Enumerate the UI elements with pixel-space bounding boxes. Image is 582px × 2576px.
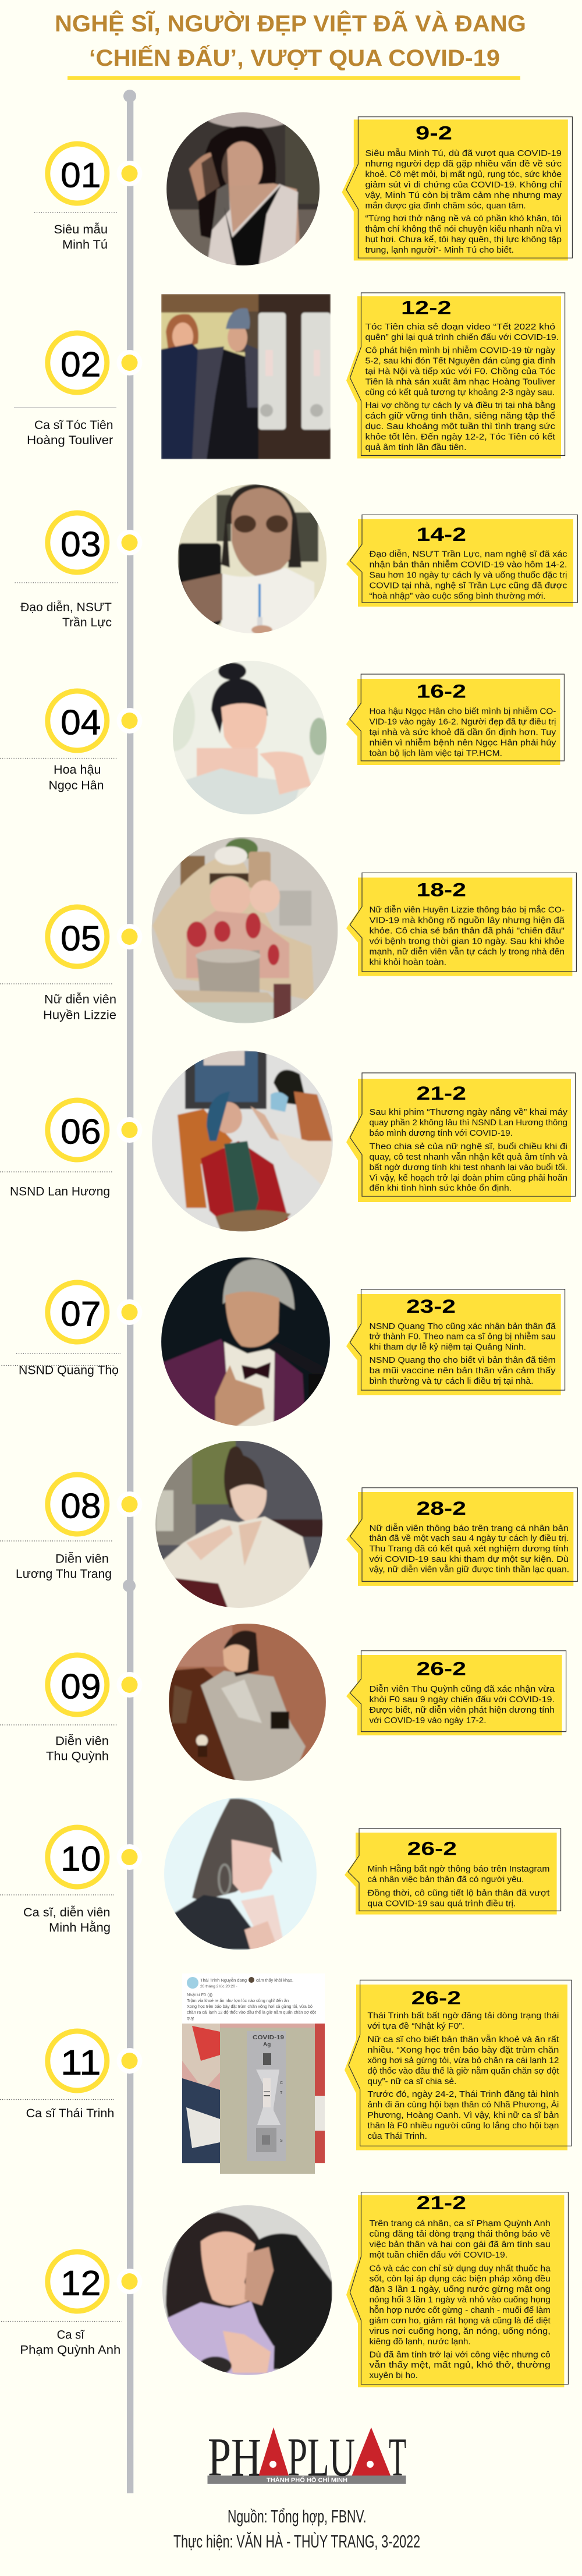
callout: 12-2: Hai vợ chồng tự cách ly và điều trị tại nhà bằng — [365, 401, 555, 410]
title: NGHỆ SĨ, NGƯỜI ĐẸP VIỆT ĐÃ VÀ ĐANG — [55, 10, 526, 37]
timeline dot — [116, 2269, 142, 2294]
callout: 18-2: khi khỏi hoàn toàn. — [369, 958, 446, 968]
callout: 26-2 Thái Trinh: Phương, Hoàng Oanh. Vì vậy, khi nữ ca sĩ bản — [367, 2111, 559, 2120]
panel: item 12 Phạm Quỳnh Anh — [1, 2192, 568, 2387]
number badge 01 — [48, 144, 107, 203]
callout: 26-2 Minh Hằng: Đồng thời, cô cũng tiết lộ bản thân đã vượt — [367, 1888, 549, 1898]
callout: 21-2 Phạm Quỳnh Anh: xuyên bị ho. — [369, 2371, 418, 2380]
number badge 08 — [48, 1475, 107, 1534]
callout: 26-2 Thái Trinh: thân là F0 nhiều người cũng lo lắng cho hội bạn — [367, 2121, 559, 2131]
callout: 9-2: trung, lạnh người”- Minh Tú cho biết. — [365, 246, 514, 255]
panel: item 02 Tóc Tiên, Hoàng Touliver — [14, 293, 565, 459]
callout: 21-2 Phạm Quỳnh Anh: 21-2 — [417, 2192, 466, 2213]
photo: couple and test kits — [161, 294, 331, 459]
name: Minh Tú — [62, 238, 108, 251]
callout: 14-2 — [346, 515, 577, 607]
callout: 18-2: với bệnh trong thời gian 10 ngày. Sau khi khỏe — [369, 937, 565, 947]
number badge 01: 01 — [61, 156, 101, 194]
callout: 26-2 Thái Trinh: Nữ ca sĩ cho biết bản thân vẫn khoẻ và ăn rất — [367, 2035, 559, 2044]
name — [49, 763, 104, 792]
name: Thu Quỳnh — [46, 1750, 109, 1763]
callout: 28-2 — [346, 1488, 577, 1586]
callout: 14-2: Đạo diễn, NSƯT Trần Lực, nam nghệ sĩ đã xác — [369, 549, 567, 559]
callout: 21-2: quay, cô test nhanh vẫn nhận kết quả âm tính và — [369, 1152, 568, 1162]
callout: 26-2 Thái Trinh: của Thái Trinh. — [367, 2132, 427, 2141]
callout: 26-2 Thái Trinh: quỵ”- nữ ca sĩ chia sẻ. — [367, 2077, 456, 2086]
photo: Huyền Lizzie — [151, 837, 338, 1025]
number badge 06: 06 — [61, 1112, 101, 1151]
callout: 18-2: Nữ diễn viên Huyền Lizzie thông báo bị mắc CO- — [369, 905, 565, 915]
photo: social post with test kit: chăn ra cái lạnh 12 độ thốc vào đầu thế là giờ nằm quấn chăn sợ đột — [187, 2010, 317, 2015]
callout: 12-2: dục. Sau khoảng một tuần thì tình trạng sức — [365, 422, 555, 431]
callout: 23-2: NSND Quang thọ cho biết vì bản thân đã tiêm — [369, 1356, 556, 1365]
callout: 9-2 — [342, 117, 572, 261]
panel: item 10 Minh Hằng — [0, 1797, 561, 1951]
callout: 26-2 Thái Trinh: với tựa đề “Nhật ký F0”. — [367, 2022, 464, 2031]
panel: item 08 Lương Thu Trang — [0, 1440, 577, 1609]
callout: 26-2 Thái Trinh — [345, 1980, 572, 2150]
photo: social post with test kit — [182, 1973, 325, 2174]
callout: 21-2: quay phần 2 không lâu thì NSND Lan Hương thông — [369, 1118, 567, 1128]
number badge 05: 05 — [61, 919, 101, 958]
timeline dot — [116, 1491, 142, 1517]
callout: 12-2: Cô phát hiện mình bị nhiễm COVID-19 từ ngày — [365, 345, 556, 355]
name — [27, 419, 113, 447]
name: Siêu mẫu — [54, 223, 108, 236]
callout: 21-2: 21-2 — [417, 1083, 466, 1104]
name: Lương Thu Trang — [16, 1568, 112, 1581]
panel: item 06 Lan Hương — [0, 1050, 575, 1232]
callout: 28-2: Nữ diễn viên thông báo trên trang cá nhân bản — [369, 1523, 569, 1533]
callout: 14-2: nhận bản thân nhiễm COVID-19 vào hôm 14-2. — [369, 559, 567, 569]
callout: 21-2 Phạm Quỳnh Anh: sốt, còn lại áp dụng các biện pháp xông đều — [369, 2274, 551, 2284]
callout: 12-2: khỏe tốt lên. Đến ngày 12-2, Tóc Tiên có kết — [365, 433, 555, 442]
photo: social post with test kit: Thái Trinh Nguyễn đang — [200, 1978, 247, 1983]
name: Hoa hậu — [54, 763, 101, 777]
name — [20, 601, 112, 629]
photo: Lương Thu Trang — [155, 1440, 324, 1609]
panel: item 01 Minh Tú — [34, 102, 572, 268]
callout: 28-2: 28-2 — [417, 1498, 466, 1519]
photo: Minh Tú — [166, 102, 321, 268]
number badge 04: 04 — [61, 703, 101, 742]
logo: Pháp Luật: PLU — [288, 2428, 355, 2488]
number badge 10 — [48, 1827, 107, 1887]
photo: social post with test kit: Ag — [263, 2042, 271, 2048]
callout: 26-2 Thái Trinh: 26-2 — [411, 1987, 461, 2008]
callout: 26-2 Thu Quỳnh: Được biết, nữ diễn viên phát hiện dương tính — [369, 1705, 555, 1715]
number badge 09: 09 — [61, 1667, 101, 1706]
title: ‘CHIẾN ĐẤU’, VƯỢT QUA COVID-19 — [89, 44, 500, 71]
callout: 21-2 Phạm Quỳnh Anh: một tuần chiến đấu với COVID-19. — [369, 2251, 508, 2260]
number badge 11: 11 — [61, 2043, 101, 2082]
logo: Pháp Luật: THÀNH PHỐ HỒ CHÍ MINH — [267, 2476, 347, 2484]
callout: 26-2 Thái Trinh: độ thốc vào đầu thế là giờ nằm quấn chăn sợ đột — [367, 2066, 559, 2076]
photo: Thu Quỳnh — [168, 1623, 327, 1781]
number badge 07: 07 — [61, 1295, 101, 1333]
number badge 02: 02 — [61, 345, 101, 384]
source and credits: Thực hiện: VĂN HÀ - THÙY TRANG, 3-2022 — [173, 2531, 420, 2552]
timeline dot — [116, 530, 142, 555]
logo: Pháp Luật — [207, 2428, 406, 2488]
callout: 16-2: tại nhà và sức khoẻ đã dần ổn định hơn. Tuy — [369, 728, 556, 737]
number badge 12 — [48, 2252, 107, 2311]
panel: item 09 Thu Quỳnh — [0, 1623, 566, 1781]
number badge 05 — [48, 907, 107, 966]
callout: 21-2 Phạm Quỳnh Anh: việc bản thân và hai con gái đã âm tính sau — [369, 2240, 551, 2249]
callout: 16-2: nhiên vì nhiễm bệnh nên Ngọc Hân phải hủy — [369, 738, 556, 747]
logo: Pháp Luật: T — [389, 2428, 406, 2488]
callout: 26-2 Minh Hằng: qua COVID-19 sau quá trình điều trị. — [367, 1899, 516, 1908]
callout: 26-2 Minh Hằng — [345, 1829, 561, 1915]
callout: 26-2 Thu Quỳnh — [346, 1651, 566, 1735]
panel: item 05 Huyền Lizzie — [0, 837, 576, 1025]
timeline dot — [116, 1844, 142, 1870]
callout: 9-2: hụt hơi. Chưa kể, tôi hay quên, thị lực không tập — [365, 235, 562, 245]
photo: social post with test kit: COVID-19 — [253, 2035, 285, 2041]
photo: social post with test kit: Nhật kí F0 :))) — [187, 1992, 212, 1997]
callout: 12-2: quên” ghi lại quá trình chiến đấu với COVID-19. — [365, 333, 559, 342]
name: NSND Quang Thọ — [19, 1364, 119, 1377]
callout: 28-2: thân đã về một vạch sau 4 ngày tự cách ly điều trị. — [369, 1534, 569, 1543]
callout: 21-2 Phạm Quỳnh Anh: hỗn hợp nước cốt gừng - chanh - muối để làm — [369, 2305, 551, 2315]
name: Diễn viên — [55, 1553, 109, 1566]
timeline dot — [116, 1117, 142, 1143]
timeline dot — [116, 708, 142, 734]
callout: 21-2 Phạm Quỳnh Anh: cũng đăng tải dòng trạng thái thông báo về — [369, 2230, 551, 2239]
name: Huyền Lizzie — [43, 1009, 116, 1022]
callout: 21-2: Theo chia sẻ của nữ nghệ sĩ, buổi chiều khi đi — [369, 1142, 567, 1151]
callout: 21-2 Phạm Quỳnh Anh: vẫn thấy mệt, mất ngủ, khó thở, thường — [369, 2360, 551, 2370]
number badge 09 — [48, 1655, 107, 1714]
callout: 16-2: VID-19 vào ngày 16-2. Người đẹp đã tự điều trị — [369, 717, 556, 727]
name — [43, 993, 116, 1022]
callout: 9-2: thậm chí không thể nói chuyện kiểu nhanh nữa vì — [365, 225, 562, 234]
timeline spine — [123, 90, 136, 2493]
callout: 14-2: 14-2 — [417, 524, 466, 545]
callout: 16-2: 16-2 — [417, 681, 466, 702]
name — [23, 1906, 111, 1934]
photo: social post with test kit: Xong học trên báo bày đặt trùm chăn xông hơi sả gừng tỏi, vừa bỏ — [187, 2004, 313, 2009]
callout: 26-2 Thái Trinh: xông hơi sả gừng tỏi, vừa bỏ chăn ra cái lạnh 12 — [367, 2056, 559, 2065]
callout: 9-2: “Từng hơi thở nặng nề và có phần khó khăn, tôi — [365, 214, 562, 224]
title underline — [68, 76, 520, 80]
callout: 18-2: khỏe. Cô chia sẻ bản thân đã phải "chiến đấu" — [369, 927, 565, 936]
callout: 18-2: VID-19 mà không rõ nguồn lây nhưng hiện đã — [369, 916, 565, 926]
number badge 02 — [48, 333, 107, 392]
callout: 16-2: toàn bộ lịch làm việc tại TP.HCM. — [369, 749, 502, 758]
source and credits: Nguồn: Tổng hợp, FBNV. — [228, 2506, 367, 2527]
number badge 08: 08 — [61, 1487, 101, 1525]
callout: 23-2 — [346, 1289, 565, 1395]
photo: social post with test kit: T — [280, 2091, 283, 2095]
callout: 18-2: mạnh, nữ diễn viên vẫn tự cách ly trong nhà đến — [369, 947, 565, 957]
callout: 21-2 Phạm Quỳnh Anh — [346, 2192, 568, 2387]
callout: 26-2 Thu Quỳnh: với COVID-19 vào ngày 17-2. — [369, 1716, 487, 1725]
callout: 21-2: Sau khi phim “Thương ngày nắng về” khai máy — [369, 1107, 568, 1117]
callout: 12-2: 12-2 — [401, 297, 452, 318]
panel: item 07 Quang Thọ — [1, 1257, 565, 1427]
name: Ca sĩ — [57, 2329, 85, 2341]
name: Ca sĩ, diễn viên — [23, 1906, 111, 1919]
name: Ca sĩ Thái Trinh — [26, 2107, 114, 2120]
source and credits — [173, 2506, 420, 2552]
callout: 14-2: “hoà nhập” vào cuộc sống bình thường mới. — [369, 591, 546, 601]
callout: 12-2: Tóc Tiên chia sẻ đoạn video “Tết 2022 khó — [365, 323, 555, 332]
callout: 12-2: Tiên là nhà sản xuất âm nhạc Hoàng Touliver — [365, 377, 555, 387]
callout: 21-2 Phạm Quỳnh Anh: Trên trang cá nhân, ca sĩ Phạm Quỳnh Anh — [369, 2219, 551, 2228]
callout: 23-2: 23-2 — [406, 1296, 456, 1317]
callout: 9-2: giảm sút vì di chứng của COVID-19. Không chỉ — [365, 180, 562, 190]
callout: 9-2: Siêu mẫu Minh Tú, dù đã vượt qua COVID-19 — [365, 148, 562, 158]
callout: 26-2 Thái Trinh: Trước đó, ngày 24-2, Thái Trinh đăng tải hình — [367, 2090, 559, 2099]
name: Trần Lực — [62, 616, 112, 629]
name — [20, 2329, 120, 2357]
callout: 21-2 Phạm Quỳnh Anh: virus nơi cuống họng, ăn nóng, uống nóng, — [369, 2327, 551, 2336]
number badge 11 — [48, 2031, 107, 2090]
callout: 26-2 Thu Quỳnh: Diễn viên Thu Quỳnh cũng đã xác nhận vừa — [369, 1684, 555, 1694]
callout: 14-2: Sau hơn 10 ngày tự cách ly và uống thuốc đặc trị — [369, 571, 567, 580]
timeline dot — [116, 1299, 142, 1325]
callout: 18-2: 18-2 — [417, 880, 466, 901]
callout: 26-2 Thu Quỳnh: khỏi F0 sau 9 ngày chiến đấu với COVID-19. — [369, 1695, 555, 1705]
callout: 23-2: ba mũi vaccine nên bản thân vẫn cảm thấy — [369, 1366, 556, 1376]
callout: 12-2: quả âm tính lần đầu tiên. — [365, 443, 467, 452]
photo: Lan Hương — [151, 1050, 333, 1232]
callout: 21-2 Phạm Quỳnh Anh: nóng hổi 3 lần 1 ngày và nhỏ vào cuống họng — [369, 2295, 551, 2305]
photo: social post with test kit: 26 tháng 2 lúc 20:20 · — [200, 1985, 237, 1989]
callout: 9-2: mắn được gia đình chăm sóc, quan tâm. — [365, 201, 526, 211]
callout: 21-2 Phạm Quỳnh Anh: giảm cơn ho, giảm rát họng và cũng là để diệt — [369, 2316, 551, 2326]
callout: 12-2 — [346, 293, 565, 459]
callout: 26-2 Minh Hằng: 26-2 — [407, 1838, 457, 1859]
callout: 28-2: Thu Trang đã có kết quả xét nghiệm dương tính — [369, 1544, 569, 1554]
callout: 28-2: vậy, nữ diễn viên vẫn giữ được tinh thần lạc quan. — [369, 1565, 569, 1575]
callout: 18-2 — [346, 873, 576, 976]
callout: 26-2 Thái Trinh: nhiều. “Xong học trên báo bày đặt trùm chăn — [367, 2046, 559, 2055]
name: NSND Lan Hương — [10, 1185, 110, 1199]
callout: 23-2: trở thành F0. Theo nam ca sĩ ông bị nhiễm sau — [369, 1332, 556, 1341]
timeline dot — [116, 350, 142, 375]
callout: 12-2: cách giữ vững tinh thần, siêng năng tập thể — [365, 412, 555, 421]
callout: 21-2: Vì vậy, kế hoạch trở lại đoàn phim cũng phải hoãn — [369, 1174, 567, 1183]
number badge 04 — [48, 691, 107, 750]
number badge 10: 10 — [61, 1840, 101, 1878]
callout: 9-2: nhưng người đẹp đã gặp nhiều vấn đề về sức — [365, 160, 562, 169]
panel: item 11 Thái Trinh — [0, 1973, 572, 2174]
callout: 28-2: với COVID-19 sau khi tham dự một sự kiện. Dù — [369, 1555, 569, 1564]
callout: 12-2: tại Hà Nội và tiếp xúc với F0. Chồng của Tóc — [365, 367, 555, 376]
name: Phạm Quỳnh Anh — [20, 2344, 120, 2357]
callout: 21-2 Phạm Quỳnh Anh: Cô và các con chỉ sử dụng duy nhất thuốc hạ — [369, 2264, 551, 2273]
photo: social post with test kit: Trộm vía khoẻ re ăn như lợn lúc nào cũng nghĩ đến ăn — [187, 1998, 289, 2003]
logo: Pháp Luật: PH — [208, 2428, 261, 2488]
photo: Ngọc Hân — [173, 661, 327, 814]
callout: 21-2: bất ngờ dương tính khi test nhanh lại vào buổi tối. — [369, 1163, 567, 1172]
title — [55, 10, 526, 71]
photo: Quang Thọ — [161, 1257, 332, 1427]
number badge 06 — [48, 1100, 107, 1160]
callout: 21-2 Phạm Quỳnh Anh: kiêng đồ lạnh, nước lạnh. — [369, 2337, 471, 2347]
photo: social post with test kit: S — [280, 2139, 283, 2143]
callout: 14-2: COVID tại nhà, nghệ sĩ Trần Lực cũng đã được — [369, 581, 567, 590]
timeline dot — [116, 924, 142, 949]
number badge 03: 03 — [61, 525, 101, 564]
name: Nữ diễn viên — [44, 993, 116, 1007]
photo: Trần Lực — [178, 484, 327, 635]
callout: 21-2 Phạm Quỳnh Anh: Dù đã âm tính trở lại với công việc nhưng cô — [369, 2350, 551, 2359]
name: Hoàng Touliver — [27, 434, 113, 447]
callout: 9-2: 9-2 — [416, 122, 452, 143]
callout: 12-2: 5-2, sau khi đón Tết Nguyên đán cùng gia đình — [365, 356, 555, 366]
panel: item 04 Ngọc Hân — [0, 660, 564, 815]
callout: 26-2 Minh Hằng: Minh Hằng bất ngờ thông báo trên Instagram — [367, 1864, 549, 1874]
callout: 26-2 Thái Trinh: Thái Trinh bất bất ngờ đăng tải dòng trạng thái — [367, 2011, 559, 2021]
callout: 16-2: Hoa hậu Ngọc Hân cho biết mình bị nhiễm CO- — [369, 706, 556, 716]
name: Đạo diễn, NSƯT — [20, 601, 112, 614]
callout: 9-2: khoẻ. Cô mệt mỏi, bị mất ngủ, rụng tóc, sức khỏe — [365, 170, 562, 179]
name: Ngọc Hân — [49, 779, 104, 792]
name — [54, 223, 108, 251]
panel: item 03 Trần Lực — [15, 484, 577, 635]
photo: Phạm Quỳnh Anh — [162, 2205, 333, 2376]
name: Diễn viên — [55, 1735, 109, 1748]
name: Minh Hằng — [49, 1921, 111, 1934]
callout: 26-2 Minh Hằng: cá nhân việc bản thân đã có người yêu. — [367, 1875, 524, 1884]
photo: social post with test kit: quỵ — [187, 2015, 194, 2021]
number badge 03 — [48, 513, 107, 572]
callout: 12-2: cũng có kết quả tương tự khoảng 2-3 ngày sau. — [365, 388, 555, 397]
timeline dot — [116, 2048, 142, 2074]
callout: 23-2: khi tham dự lễ kỷ niệm tại Quảng Ninh. — [369, 1342, 526, 1352]
name — [16, 1553, 112, 1581]
name — [46, 1735, 109, 1763]
callout: 21-2: đến khi tình hình sức khỏe ổn định. — [369, 1184, 512, 1193]
callout: 21-2: báo mình dương tính với COVID-19. — [369, 1129, 513, 1138]
photo: Minh Hằng — [164, 1797, 317, 1951]
callout: 26-2 Thái Trinh: ảnh đi ăn cùng hội bạn thân có Nhã Phương, Ái — [367, 2100, 559, 2110]
callout: 23-2: NSND Quang Thọ cũng xác nhận bản thân đã — [369, 1322, 556, 1331]
timeline dot — [116, 161, 142, 186]
callout: 23-2: bình thường và tự cách li điều trị tại nhà. — [369, 1377, 533, 1386]
callout: 21-2 — [346, 1073, 575, 1202]
callout: 21-2 Phạm Quỳnh Anh: đặn 3 lần 1 ngày, uống nước gừng mật ong — [369, 2285, 551, 2294]
number badge 07 — [48, 1282, 107, 1342]
photo: social post with test kit: C — [280, 2081, 283, 2085]
callout: 9-2: vậy, Minh Tú còn bị trầm cảm nhẹ nhưng may — [365, 191, 562, 200]
photo: social post with test kit: cảm thấy khỏi khạo. — [256, 1978, 293, 1983]
callout: 16-2 — [346, 674, 564, 765]
timeline dot — [116, 1672, 142, 1698]
callout: 26-2 Thu Quỳnh: 26-2 — [417, 1658, 466, 1679]
name: Ca sĩ Tóc Tiên — [34, 419, 113, 432]
number badge 12: 12 — [61, 2263, 101, 2303]
